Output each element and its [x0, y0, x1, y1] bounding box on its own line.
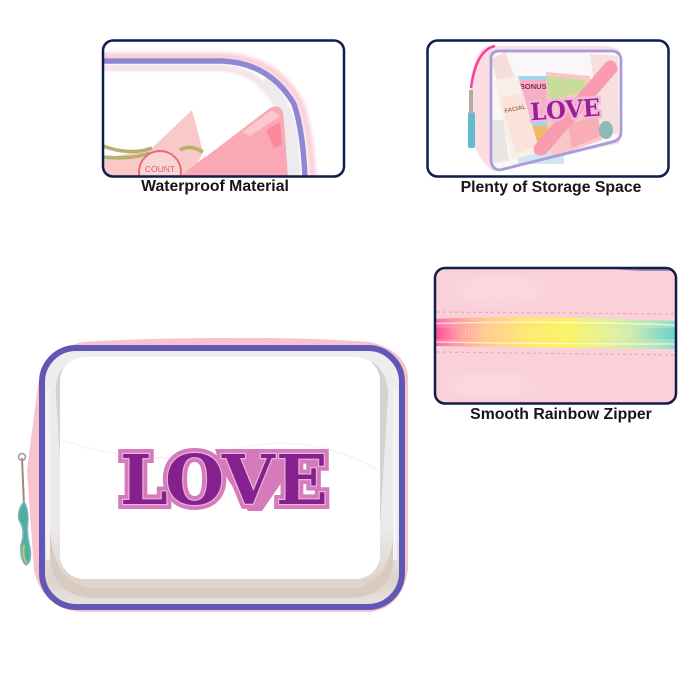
patch backing around V	[215, 449, 290, 511]
tan inner bottom shading	[50, 530, 394, 598]
product: clear pouch	[18, 338, 408, 612]
top rear lining	[492, 52, 514, 80]
patch outline: LOVE	[120, 441, 328, 521]
panel: waterproof material	[100, 40, 344, 193]
lotion bottle	[494, 76, 540, 160]
pink zipper side	[471, 46, 495, 88]
side shading	[56, 362, 388, 560]
purple trim	[491, 51, 621, 170]
pink label	[519, 80, 547, 116]
pink body	[27, 338, 408, 612]
count badge	[138, 150, 182, 176]
rainbow zipper	[435, 317, 676, 349]
translucent seam side	[262, 82, 294, 178]
pouch body	[470, 46, 620, 171]
pink glow edge	[100, 56, 313, 178]
glossy crease	[62, 440, 378, 470]
soft leather highlights	[468, 283, 531, 297]
purple trim	[100, 61, 305, 178]
love patch: LOVE	[529, 93, 601, 126]
pale highlight strip	[48, 390, 395, 560]
pale inline: LOVE	[120, 441, 328, 521]
panel: smooth rainbow zipper	[435, 268, 676, 404]
zipper teeth highlights	[435, 322, 676, 344]
pink toothbrush case	[534, 60, 618, 156]
zipper pull	[468, 112, 475, 148]
love patch	[120, 441, 328, 521]
panel: waterproof material: COUNT	[145, 164, 175, 174]
green string	[103, 146, 203, 158]
translucent seam top	[100, 68, 268, 90]
pink toothbrush case	[206, 106, 288, 176]
panel: plenty of storage space: BONUS	[519, 82, 547, 91]
caption: plenty of storage space: Plenty of Storage Space	[461, 179, 642, 196]
panel: plenty of storage space	[428, 40, 668, 176]
panel: plenty of storage space: FACIAL	[504, 105, 527, 115]
paper tag	[103, 110, 203, 178]
translucent seam	[42, 348, 402, 607]
caption: smooth rainbow zipper: Smooth Rainbow Zipper	[470, 406, 652, 423]
clear window	[60, 357, 380, 579]
glitter lettering: LOVE	[120, 441, 328, 521]
purple trim	[42, 348, 402, 607]
wipes packs	[546, 72, 602, 156]
love patch: LOVE	[529, 93, 601, 126]
blue bottle	[518, 76, 548, 126]
zipper pull charm	[18, 454, 30, 565]
caption: waterproof material: Waterproof Material	[141, 178, 289, 195]
stitching	[437, 312, 676, 355]
clear window	[491, 51, 621, 170]
